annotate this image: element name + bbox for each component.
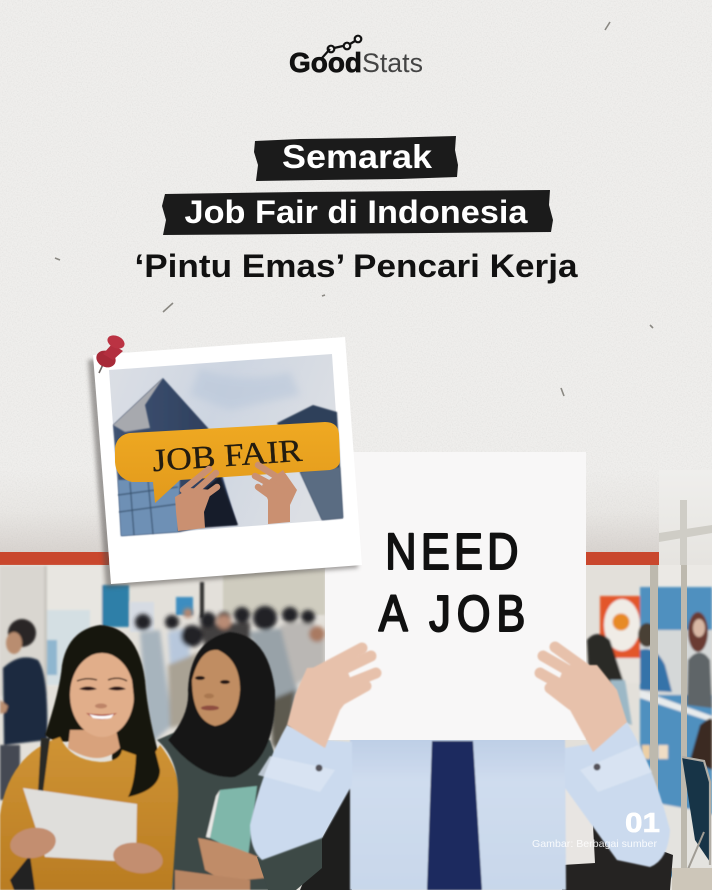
red booth band left	[0, 552, 109, 565]
red push pin	[94, 333, 127, 373]
front hair	[68, 627, 138, 690]
chair	[679, 757, 710, 890]
sign text: NEED: NEED	[385, 524, 523, 581]
face	[70, 653, 134, 737]
hair back	[45, 625, 162, 797]
right window area	[659, 470, 712, 590]
right building	[277, 405, 343, 520]
title block	[134, 136, 578, 284]
title band: Semarak: Semarak	[282, 138, 433, 175]
title band: Job Fair di Indonesia	[162, 190, 553, 235]
orange poster	[600, 596, 642, 658]
blue banner	[640, 587, 712, 877]
title band: Semarak	[254, 136, 458, 181]
mustard sweater	[0, 737, 181, 890]
logo: GoodStats	[289, 36, 423, 78]
bubble text: JOB FAIR	[151, 432, 304, 478]
sign board	[325, 452, 586, 740]
people: woman with paper	[0, 625, 181, 890]
hand on book	[198, 838, 265, 882]
hiring sign	[325, 452, 586, 740]
people: woman in hijab	[157, 632, 322, 890]
paper	[23, 788, 137, 862]
job fair picture	[109, 354, 343, 536]
orange speech bubble	[115, 422, 340, 503]
face	[192, 650, 240, 726]
right booth banners	[587, 587, 712, 877]
left hand	[287, 648, 376, 748]
booth visitor	[587, 634, 623, 700]
red booth band right	[586, 552, 659, 565]
tie	[427, 741, 482, 890]
dark cardigan	[157, 730, 322, 890]
man's hands on sign	[287, 647, 627, 752]
eyes and lips	[195, 676, 230, 710]
left sleeve	[250, 725, 352, 860]
sign text: A JOB: A JOB	[379, 586, 531, 643]
cuffs and cufflinks	[258, 745, 652, 792]
holding hands	[175, 465, 297, 531]
polaroid frame	[93, 337, 362, 584]
right sleeve	[565, 722, 670, 867]
facial features	[77, 678, 127, 720]
person near chair	[690, 718, 712, 770]
green book	[210, 786, 257, 857]
right hand	[540, 647, 627, 752]
booth poles	[650, 565, 687, 890]
glass facade	[118, 478, 180, 536]
title band: Job Fair di Indonesia: Job Fair di Indonesia	[184, 194, 528, 230]
logo wordmark: Good	[289, 47, 362, 78]
polaroid shadow	[88, 342, 358, 588]
page number: 01	[625, 807, 660, 838]
hall wall	[0, 565, 712, 890]
logo wordmark: Stats	[362, 48, 423, 78]
polaroid photo	[88, 333, 362, 588]
left building	[113, 378, 237, 536]
dark seated figure behind man	[257, 782, 673, 890]
shirt torso	[350, 735, 566, 890]
man in the left background	[0, 619, 47, 800]
hands	[8, 824, 58, 862]
sky	[109, 354, 343, 536]
blurred booths and crowd	[0, 566, 325, 696]
neck	[68, 730, 120, 758]
man holding sign	[250, 722, 670, 890]
photo background: job fair hall	[0, 470, 712, 890]
logo chart line icon	[322, 36, 361, 58]
image credit: Gambar: Berbagai sumber	[532, 838, 657, 850]
bag strap	[38, 738, 50, 792]
hijab	[168, 632, 275, 777]
subtitle: ‘Pintu Emas’ Pencari Kerja	[134, 248, 578, 284]
